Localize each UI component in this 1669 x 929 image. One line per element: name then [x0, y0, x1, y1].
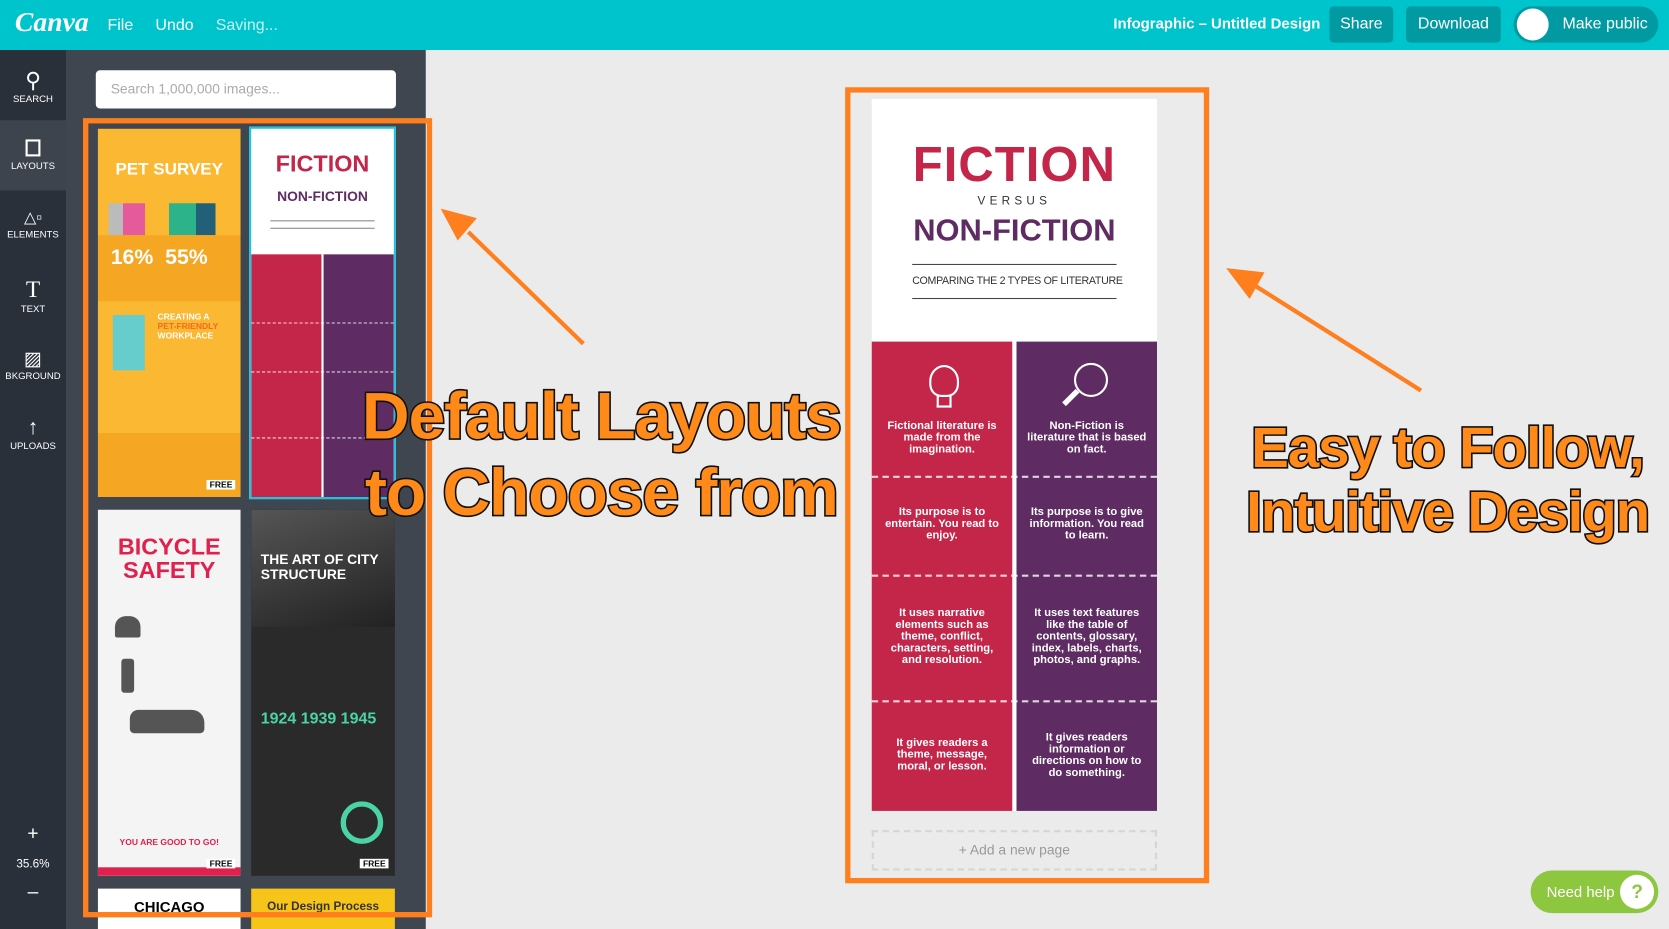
thumbnail: pet survey: 16% 55% [111, 246, 208, 269]
background tool: ▨ [24, 348, 42, 369]
add page [872, 830, 1157, 871]
share button [1329, 6, 1393, 43]
thumbnail: pet survey: WORKPLACE [158, 331, 213, 341]
thumbnail: art of city structure: THE ART OF CITY [261, 551, 379, 567]
logo: Canva [15, 6, 89, 37]
thumbnail: chicago [98, 889, 241, 929]
share button: Share [1340, 15, 1383, 33]
text tool [20, 276, 45, 314]
add page: + Add a new page [959, 842, 1070, 858]
zoom controls: – [28, 881, 38, 902]
thumbnail: fiction: NON-FICTION [277, 188, 368, 204]
thumbnail: design process: Our Design Process [267, 900, 379, 913]
search box [96, 70, 396, 109]
fiction column: Its purpose is to entertain. You read to enjoy. [885, 505, 999, 542]
thumbnail: bicycle safety: YOU ARE GOOD TO GO! [120, 838, 219, 847]
arrow: to layouts [441, 209, 583, 344]
non-fiction column [1017, 342, 1157, 811]
top bar [0, 0, 1669, 50]
title: FICTION [913, 136, 1116, 192]
non-fiction column: Non-Fiction is literature that is based on fact. [1027, 419, 1146, 455]
subtitle: COMPARING THE 2 TYPES OF LITERATURE [912, 276, 1123, 287]
thumbnail: art of city structure: 1924 1939 1945 [261, 710, 376, 728]
layouts tool [11, 139, 55, 171]
thumbnail: pet survey: PET SURVEY [115, 161, 223, 179]
sidebar [0, 50, 66, 929]
thumbnail: design process [251, 889, 395, 929]
search box: Search 1,000,000 images... [111, 81, 280, 97]
non-fiction column: It uses text features like the table of contents, glossary, index, labels, charts, photos, and graphs. [1032, 607, 1142, 666]
canvas page [872, 99, 1157, 811]
fiction column [872, 342, 1012, 811]
make public toggle [1514, 6, 1658, 43]
fiction column: Fictional literature is made from the imagination. [887, 419, 997, 455]
thumbnail: pet survey [98, 129, 241, 497]
thumbnail: fiction [249, 127, 396, 499]
non-fiction column: It gives readers information or directions on how to do something. [1032, 731, 1141, 779]
need help button [1531, 871, 1658, 913]
text tool: T [26, 276, 40, 302]
elements tool: ELEMENTS [7, 229, 59, 239]
uploads tool: UPLOADS [10, 441, 56, 451]
fiction column: It uses narrative elements such as theme, conflict, characters, setting, and resolution. [891, 607, 993, 666]
callout: default layouts: Default Layouts [362, 380, 841, 453]
arrow: to canvas [1226, 268, 1421, 391]
thumbnail: art of city structure: FREE [363, 859, 386, 868]
zoom controls: + [27, 823, 39, 844]
need help button: Need help [1547, 883, 1615, 900]
zoom controls: 35.6% [16, 858, 50, 871]
thumbnail: art of city structure: STRUCTURE [261, 566, 346, 582]
orange highlight: canvas [845, 87, 1209, 883]
need help button: ? [1631, 881, 1643, 902]
search tool [13, 69, 53, 104]
canvas page: NON-FICTION [913, 214, 1116, 248]
callout: default layouts [362, 380, 841, 530]
thumbnail: fiction: FICTION [276, 150, 369, 177]
thumbnail: bicycle safety: SAFETY [123, 557, 215, 583]
thumbnail: pet survey: CREATING A [158, 312, 210, 321]
menu: File Undo Saving... [108, 16, 278, 34]
non-fiction column: Its purpose is to give information. You read to learn. [1030, 505, 1144, 542]
search tool: SEARCH [13, 94, 53, 104]
callout: intuitive design: Easy to Follow, [1251, 417, 1644, 480]
background tool [5, 348, 61, 381]
thumbnail: pet survey: PET-FRIENDLY [158, 321, 218, 331]
layouts panel [66, 50, 426, 929]
make public toggle: Make public [1563, 15, 1648, 33]
thumbnail: bicycle safety: BICYCLE [118, 533, 221, 560]
callout: default layouts: to Choose from [365, 457, 838, 530]
background tool: BKGROUND [5, 370, 61, 381]
thumbnail: bicycle safety: FREE [210, 859, 232, 868]
fiction column: It gives readers a theme, message, moral, or lesson. [896, 736, 988, 773]
design title: Infographic – Untitled Design [1113, 15, 1320, 32]
zoom controls [16, 823, 50, 902]
thumbnail: bicycle safety [98, 510, 241, 876]
canvas page: VERSUS [978, 195, 1051, 208]
callout: intuitive design: Intuitive Design [1246, 481, 1649, 544]
thumbnail: chicago: CHICAGO [134, 898, 204, 915]
elements tool [7, 209, 59, 239]
search tool: ⚲ [25, 69, 41, 93]
layouts tool: LAYOUTS [11, 161, 55, 171]
uploads tool [10, 416, 56, 451]
uploads tool: ↑ [28, 416, 38, 440]
text tool: TEXT [21, 303, 45, 314]
icon: magnifier [1074, 363, 1108, 397]
thumbnail: art of city structure [251, 510, 395, 876]
download button: Download [1418, 15, 1489, 33]
thumbnail: pet survey: FREE [210, 480, 232, 490]
icon: bulb [929, 365, 959, 397]
callout: intuitive design [1246, 417, 1649, 545]
elements tool: △▫ [24, 209, 42, 227]
subtitle [912, 264, 1117, 299]
download button [1406, 6, 1501, 43]
orange highlight: layouts [83, 118, 432, 917]
